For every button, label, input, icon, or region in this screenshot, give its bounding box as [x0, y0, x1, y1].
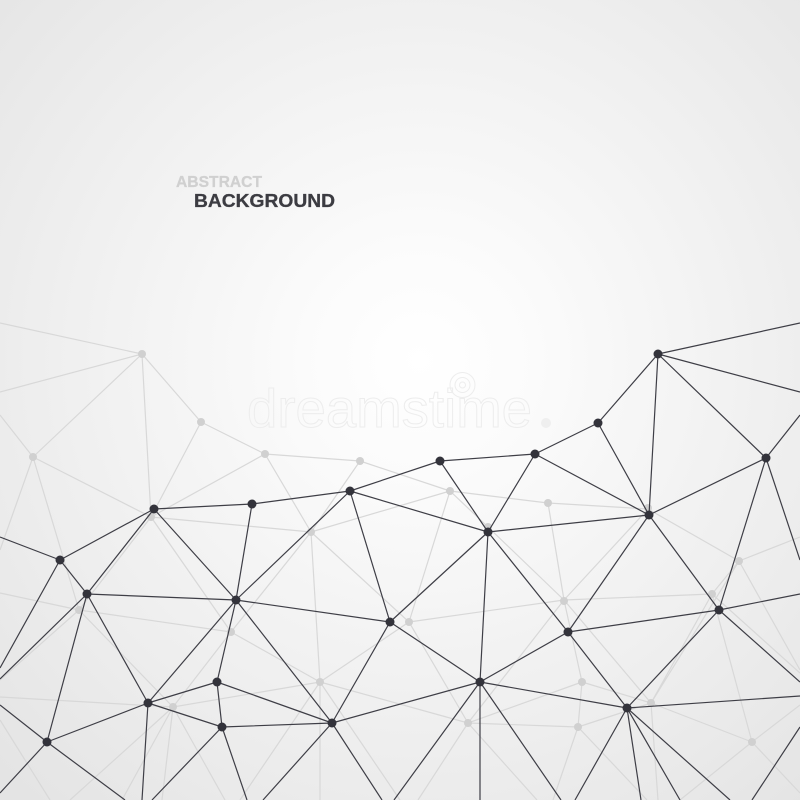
- dark foreground network: [0, 323, 800, 800]
- dark network edges: [0, 323, 800, 800]
- watermark spiral logo: [450, 372, 475, 398]
- title: [176, 174, 335, 211]
- light network edges: [0, 323, 800, 800]
- title line: abstract: ABSTRACT: [176, 174, 263, 191]
- title line: background: BACKGROUND: [194, 190, 335, 211]
- dark network nodes: [42, 350, 770, 746]
- watermark dot: [541, 418, 551, 428]
- watermark wordmark: dreamstime: [247, 379, 532, 439]
- light network nodes: [29, 350, 756, 746]
- watermark: [247, 372, 551, 439]
- light background network: [0, 323, 800, 800]
